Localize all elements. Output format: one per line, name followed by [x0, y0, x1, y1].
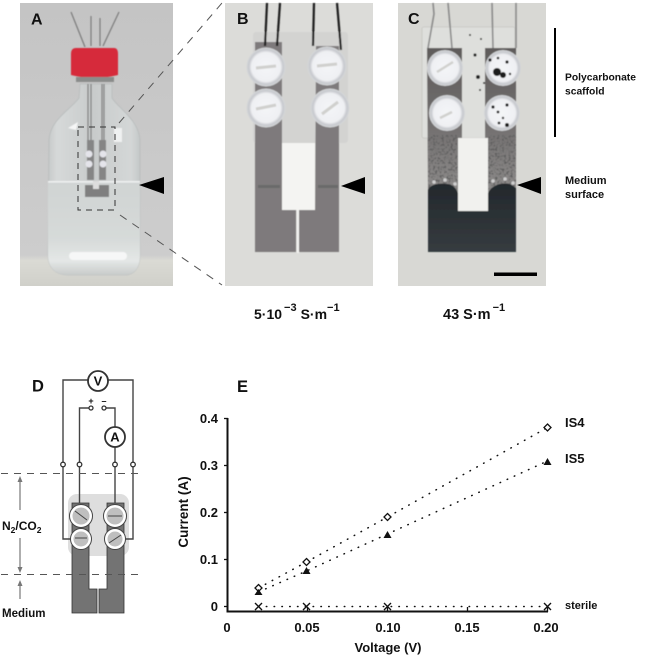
grain on strips: [428, 135, 458, 190]
x tick labels: [223, 620, 559, 635]
x tick labels: 0.05: [294, 620, 320, 635]
y axis title: Current (A): [176, 476, 191, 548]
arrowheads: [18, 476, 22, 586]
wires: [71, 12, 119, 150]
arrowhead A: [139, 177, 164, 194]
label: polycarbonate scaffold: scaffold: [565, 86, 604, 98]
y tick labels: 0.2: [200, 505, 218, 520]
voltmeter: [88, 371, 108, 391]
y tick labels: 0.4: [200, 411, 219, 426]
panel C: biofilm electrode photo: [398, 3, 546, 286]
gas phase arrows: [19, 480, 21, 599]
y tick labels: [200, 411, 219, 614]
medium-covered biofilm: [428, 183, 516, 252]
label D: D: [32, 378, 44, 396]
label N2/CO2: N: [2, 519, 11, 533]
sterile markers: [255, 603, 551, 610]
scaffold shape: [68, 494, 129, 556]
electrode miniature: [87, 140, 94, 180]
axes: [228, 418, 548, 612]
label medium: Medium: [2, 608, 45, 620]
cap: [71, 48, 118, 78]
water: [48, 182, 140, 275]
caption B: −3: [284, 302, 297, 314]
y tick labels: 0.1: [200, 552, 218, 567]
series label sterile: sterile: [565, 600, 597, 612]
x axis title: Voltage (V): [355, 640, 421, 655]
y tick labels: 0.3: [200, 458, 218, 473]
label: polycarbonate scaffold: Polycarbonate: [565, 72, 636, 84]
screws: [427, 50, 463, 86]
label N2/CO2: 2: [11, 525, 16, 535]
specks: [469, 34, 485, 91]
caption B: S·m: [301, 306, 327, 322]
label: medium surface: Medium: [565, 175, 607, 187]
wires: [265, 3, 341, 50]
label E: E: [237, 378, 248, 396]
panel A: photo of bottle: [20, 3, 173, 286]
zoom guide lines: [119, 3, 222, 285]
circuit wires: [63, 380, 133, 539]
caption C: 43 S·m: [443, 307, 491, 323]
series IS4 markers: [255, 424, 551, 592]
ammeter: [105, 427, 125, 447]
dotted series: [258, 428, 548, 606]
scaffold: [253, 32, 348, 143]
caption C: −1: [493, 302, 505, 314]
voltmeter: V: [94, 374, 103, 388]
label N2/CO2: /CO: [15, 519, 37, 533]
caption B: 5·10: [254, 306, 282, 322]
label B: B: [237, 11, 249, 28]
series label IS5: IS5: [565, 451, 585, 466]
wires: [428, 3, 516, 48]
series label IS4: IS4: [565, 415, 585, 430]
label A: A: [31, 12, 43, 28]
x tick labels: 0.15: [454, 620, 480, 635]
electrode: [255, 42, 296, 252]
grain on right strip: [488, 135, 516, 190]
scaffold: [422, 27, 515, 138]
x tick labels: 0.10: [375, 620, 401, 635]
x tick labels: 0.20: [533, 620, 559, 635]
screws: [71, 506, 125, 548]
zoom box: [78, 127, 115, 210]
scale bar: [494, 272, 537, 276]
series IS5 markers: [254, 458, 552, 595]
bracket line: scaffold: [554, 28, 556, 137]
caption B: −1: [327, 302, 340, 314]
screws: [246, 48, 286, 86]
label N2/CO2: 2: [37, 525, 42, 535]
panel B: clean electrode photo: [225, 3, 373, 286]
terminals: [61, 406, 135, 467]
y tick labels: 0: [211, 599, 218, 614]
panel D: circuit diagram: [1, 371, 142, 620]
ammeter: A: [110, 430, 120, 444]
panel E: current-voltage chart: [176, 378, 597, 655]
light fringe at medium surface: [432, 177, 515, 186]
label C: C: [408, 11, 420, 28]
polarity minus: –: [101, 396, 107, 406]
bottle body: [48, 84, 140, 275]
upper grey strips: [427, 48, 462, 192]
arrowhead B: [341, 177, 365, 194]
ticks: [224, 418, 548, 612]
label: medium surface: surface: [565, 189, 604, 201]
x tick labels: 0: [223, 620, 231, 635]
dashed levels: [1, 474, 142, 574]
arrowhead C: [517, 177, 541, 194]
polarity: +: [88, 396, 94, 406]
electrodes: [72, 503, 97, 613]
